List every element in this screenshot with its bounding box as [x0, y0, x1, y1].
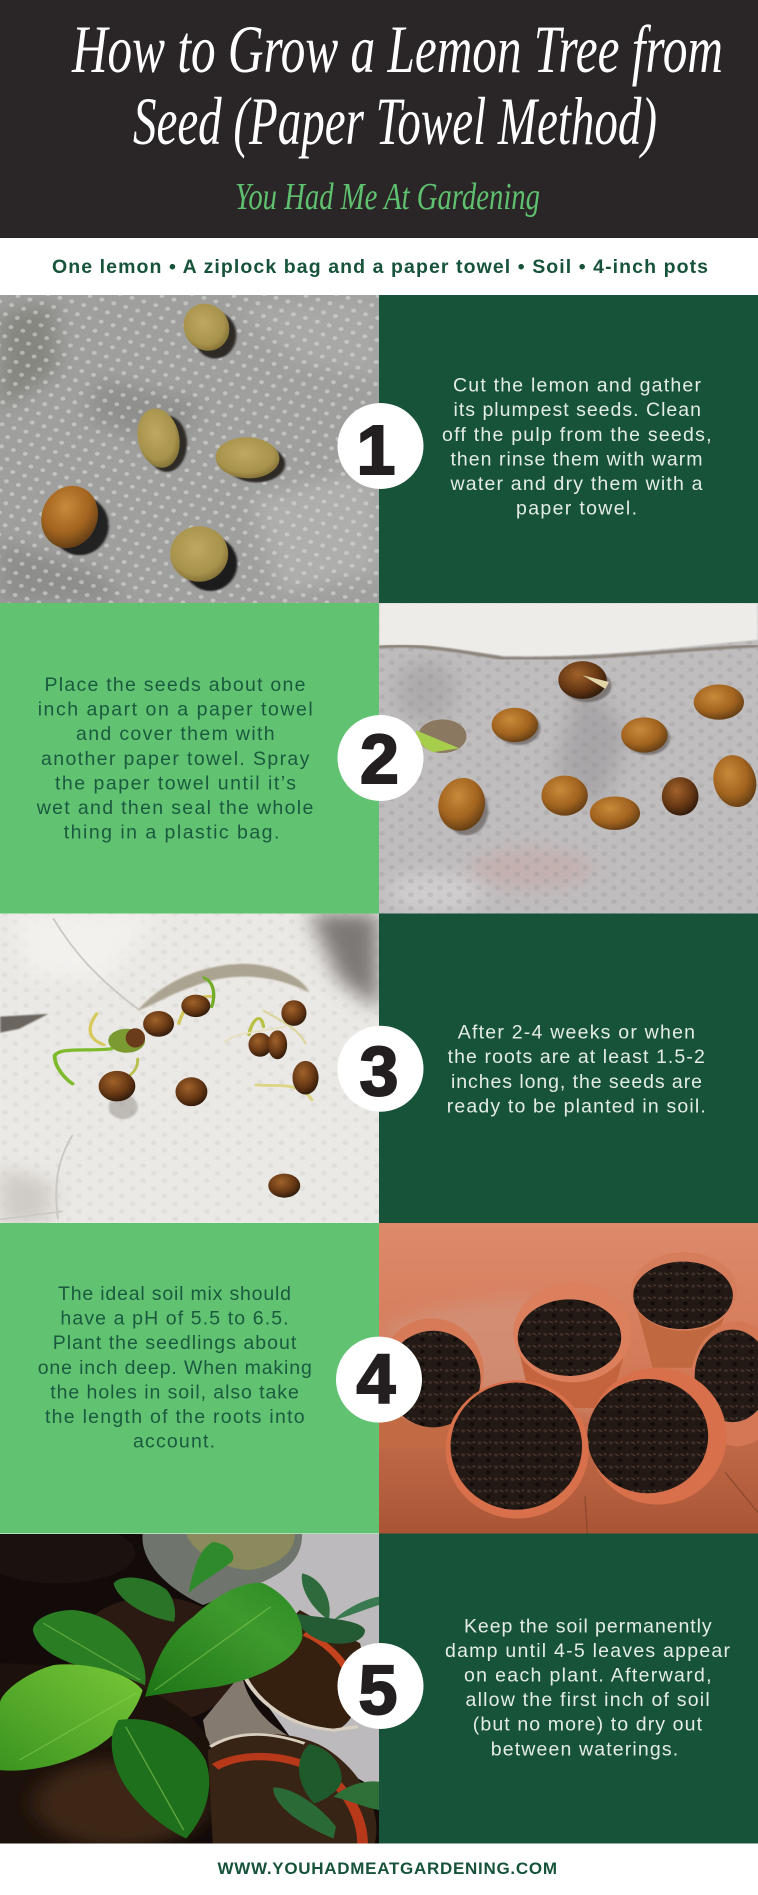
- step 1 text: paper towel.: [516, 498, 637, 520]
- step 5 text: Keep the soil permanently: [464, 1615, 712, 1637]
- pots: [379, 1252, 758, 1519]
- step 4 text: the length of the roots into: [45, 1406, 305, 1428]
- step 5 text: between waterings.: [491, 1738, 678, 1760]
- footer website: WWW.YOUHADMEATGARDENING.COM: [218, 1859, 557, 1878]
- step 4 text: Plant the seedlings about: [53, 1332, 297, 1354]
- seeds: [35, 301, 285, 591]
- step 4 text: account.: [133, 1431, 215, 1453]
- seeds: [416, 661, 758, 835]
- header panel: [0, 0, 758, 238]
- step 3 text: ready to be planted in soil.: [447, 1095, 706, 1117]
- number badge 3: [338, 1026, 424, 1112]
- step 5 text: damp until 4-5 leaves appear: [445, 1640, 730, 1662]
- title: [71, 11, 723, 159]
- step 4 text: have a pH of 5.5 to 6.5.: [60, 1308, 289, 1330]
- step 5 text: allow the first inch of soil: [466, 1689, 710, 1711]
- photo: step 2 seeds between paper towels: [379, 603, 758, 914]
- panel: step 2 text background: [0, 603, 379, 914]
- step 4 text: one inch deep. When making: [38, 1357, 312, 1379]
- photo: step 5 lemon seedlings: [0, 1534, 379, 1844]
- step 2 text: and cover them with: [76, 723, 275, 745]
- panel: step 1 text background: [379, 295, 758, 603]
- seeds and sprouts: [55, 978, 319, 1198]
- photo: step 1 seeds on paper towel: [0, 295, 379, 603]
- step 3 text: inches long, the seeds are: [451, 1071, 702, 1093]
- materials list: One lemon • A ziplock bag and a paper towel • Soil • 4-inch pots: [52, 256, 708, 278]
- step 1 text: water and dry them with a: [450, 473, 703, 495]
- number badge 4: 4: [357, 1340, 396, 1418]
- step 4 text: the holes in soil, also take: [50, 1381, 299, 1403]
- step 2 text: wet and then seal the whole: [36, 797, 313, 819]
- step 2 text: the paper towel until it’s: [55, 772, 296, 794]
- panel: step 4 text background: [0, 1223, 379, 1534]
- step 2 text: Place the seeds about one: [44, 674, 306, 696]
- step 2 text: inch apart on a paper towel: [38, 699, 313, 721]
- step 2 text: thing in a plastic bag.: [64, 822, 279, 844]
- step 1 text: off the pulp from the seeds,: [442, 424, 712, 446]
- step 4 text: The ideal soil mix should: [58, 1283, 291, 1305]
- number badge 1: 1: [357, 411, 395, 489]
- step 1 text: Cut the lemon and gather: [453, 375, 702, 397]
- step 1 text: then rinse them with warm: [450, 448, 702, 470]
- subtitle: You Had Me At Gardening: [235, 176, 540, 218]
- panel: step 3 text background: [379, 914, 758, 1223]
- step 3 text: [447, 1022, 706, 1117]
- step 5 text: on each plant. Afterward,: [464, 1664, 712, 1686]
- step 1 text: its plumpest seeds. Clean: [454, 399, 701, 421]
- step 5 text: (but no more) to dry out: [473, 1714, 703, 1736]
- panel: step 5 text background: [379, 1534, 758, 1844]
- number badge 5: [338, 1643, 424, 1729]
- step 2 text: [36, 674, 313, 844]
- number badge 1: [338, 403, 424, 489]
- step 2 text: another paper towel. Spray: [41, 748, 310, 770]
- leaves: [0, 1542, 379, 1838]
- step 5 text: [445, 1615, 730, 1760]
- step 3 text: After 2-4 weeks or when: [458, 1022, 695, 1044]
- number badge 3: 3: [360, 1032, 398, 1110]
- number badge 5: 5: [359, 1651, 397, 1729]
- photo: step 4 potted soil: [379, 1223, 758, 1534]
- number badge 2: [338, 715, 424, 801]
- step 3 text: the roots are at least 1.5-2: [448, 1046, 705, 1068]
- photo: step 3 sprouted seeds: [0, 914, 379, 1223]
- number badge 2: 2: [360, 720, 399, 798]
- number badge 4: [336, 1337, 422, 1423]
- step 4 text: [38, 1283, 312, 1453]
- step 1 text: [442, 375, 712, 520]
